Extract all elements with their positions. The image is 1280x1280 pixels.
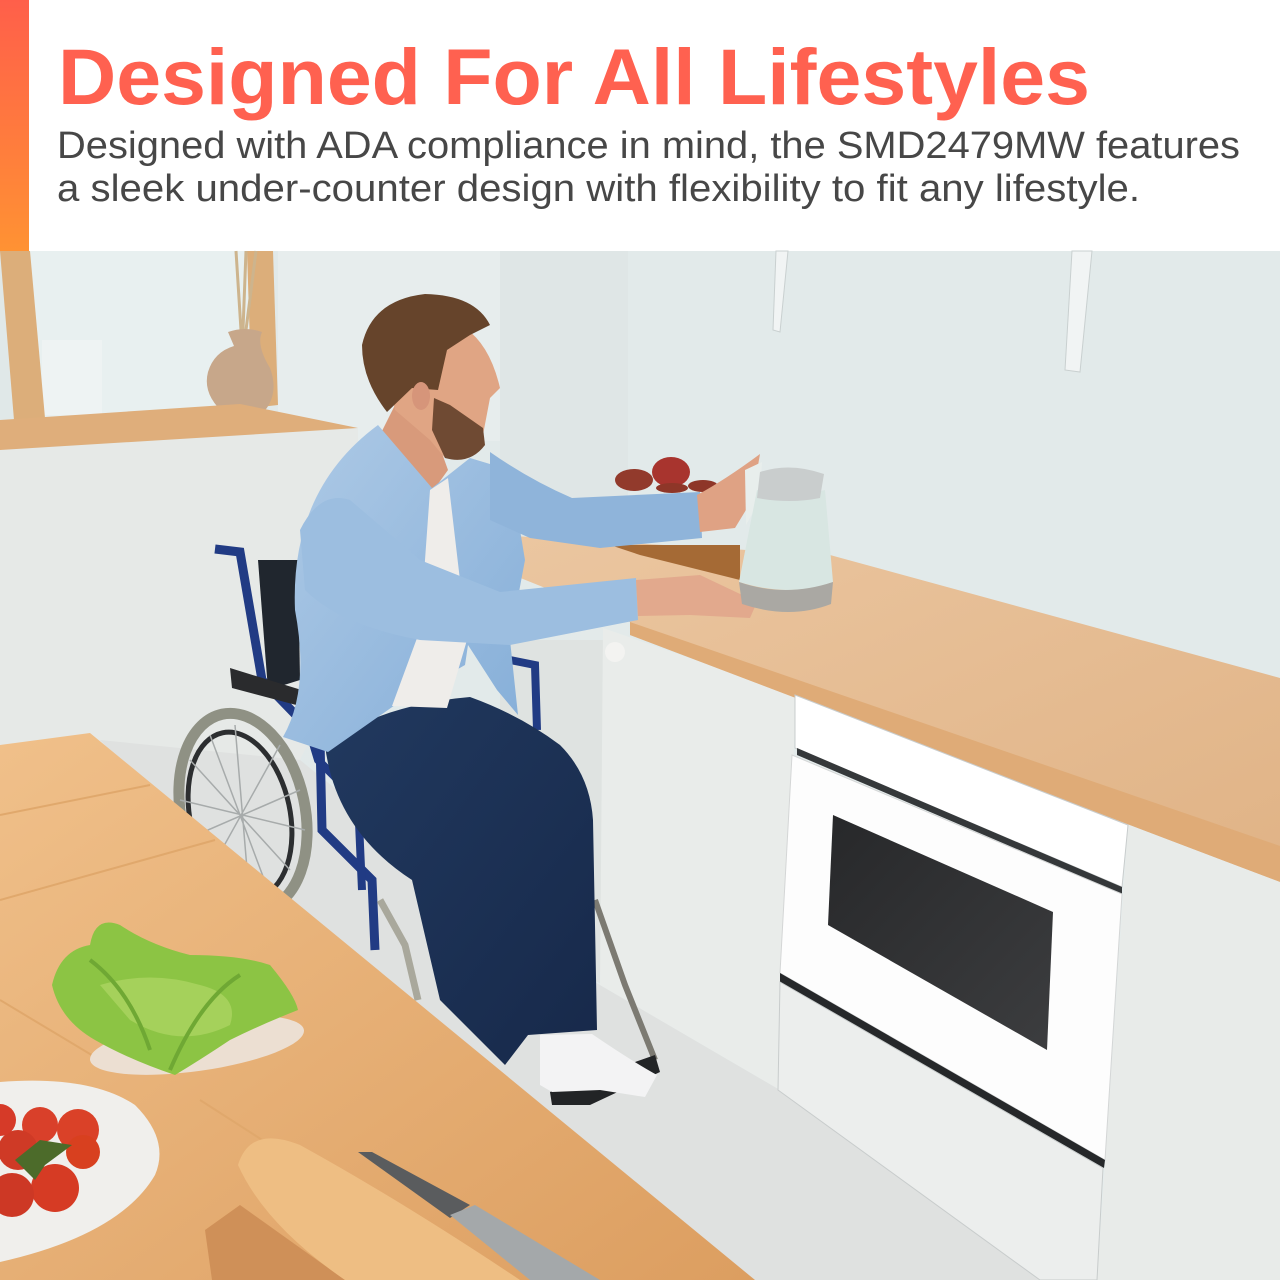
hair (362, 294, 490, 412)
frame (215, 549, 375, 950)
base cabinet (500, 628, 796, 1090)
low wall and shelf (0, 404, 358, 760)
fruit tray (610, 457, 740, 580)
accent bar (0, 0, 29, 251)
jeans (325, 697, 597, 1065)
near wheel (162, 701, 324, 923)
header panel (0, 0, 1280, 251)
ear (412, 382, 430, 410)
head (385, 327, 500, 459)
top control panel (795, 695, 1128, 887)
plate with tomatoes (0, 1081, 160, 1262)
vase (207, 251, 274, 415)
far hand (697, 454, 760, 532)
right cabinet (1097, 825, 1280, 1280)
bread and board (205, 1138, 520, 1280)
shelf brackets (773, 251, 1092, 372)
lower gap (780, 973, 1105, 1168)
description text: a sleek under-counter design with flexibility to fit any lifestyle. (57, 168, 1140, 210)
lower drawer (778, 982, 1103, 1280)
floor (100, 740, 1040, 1280)
description text: Designed with ADA compliance in mind, the SMD2479MW features (57, 125, 1240, 167)
plate with lettuce (52, 922, 308, 1086)
kettle (739, 462, 833, 612)
near sleeve (300, 498, 638, 645)
window (828, 815, 1053, 1050)
foreground table (0, 733, 755, 1280)
countertop (513, 536, 1280, 882)
description text (57, 125, 1240, 210)
sock (540, 1034, 657, 1097)
far sleeve (490, 452, 702, 548)
knife (358, 1152, 600, 1280)
beard (432, 398, 485, 460)
shirt torso (283, 425, 525, 752)
white tee (392, 478, 467, 708)
wheelchair (162, 549, 660, 1105)
neck (380, 405, 448, 495)
window frame (0, 251, 278, 420)
near hand (636, 575, 757, 618)
under-counter microwave drawer (778, 695, 1128, 1280)
door (780, 755, 1122, 1160)
title: Designed For All Lifestyles (58, 32, 1090, 121)
far wheel (469, 823, 521, 967)
man (283, 294, 833, 1097)
